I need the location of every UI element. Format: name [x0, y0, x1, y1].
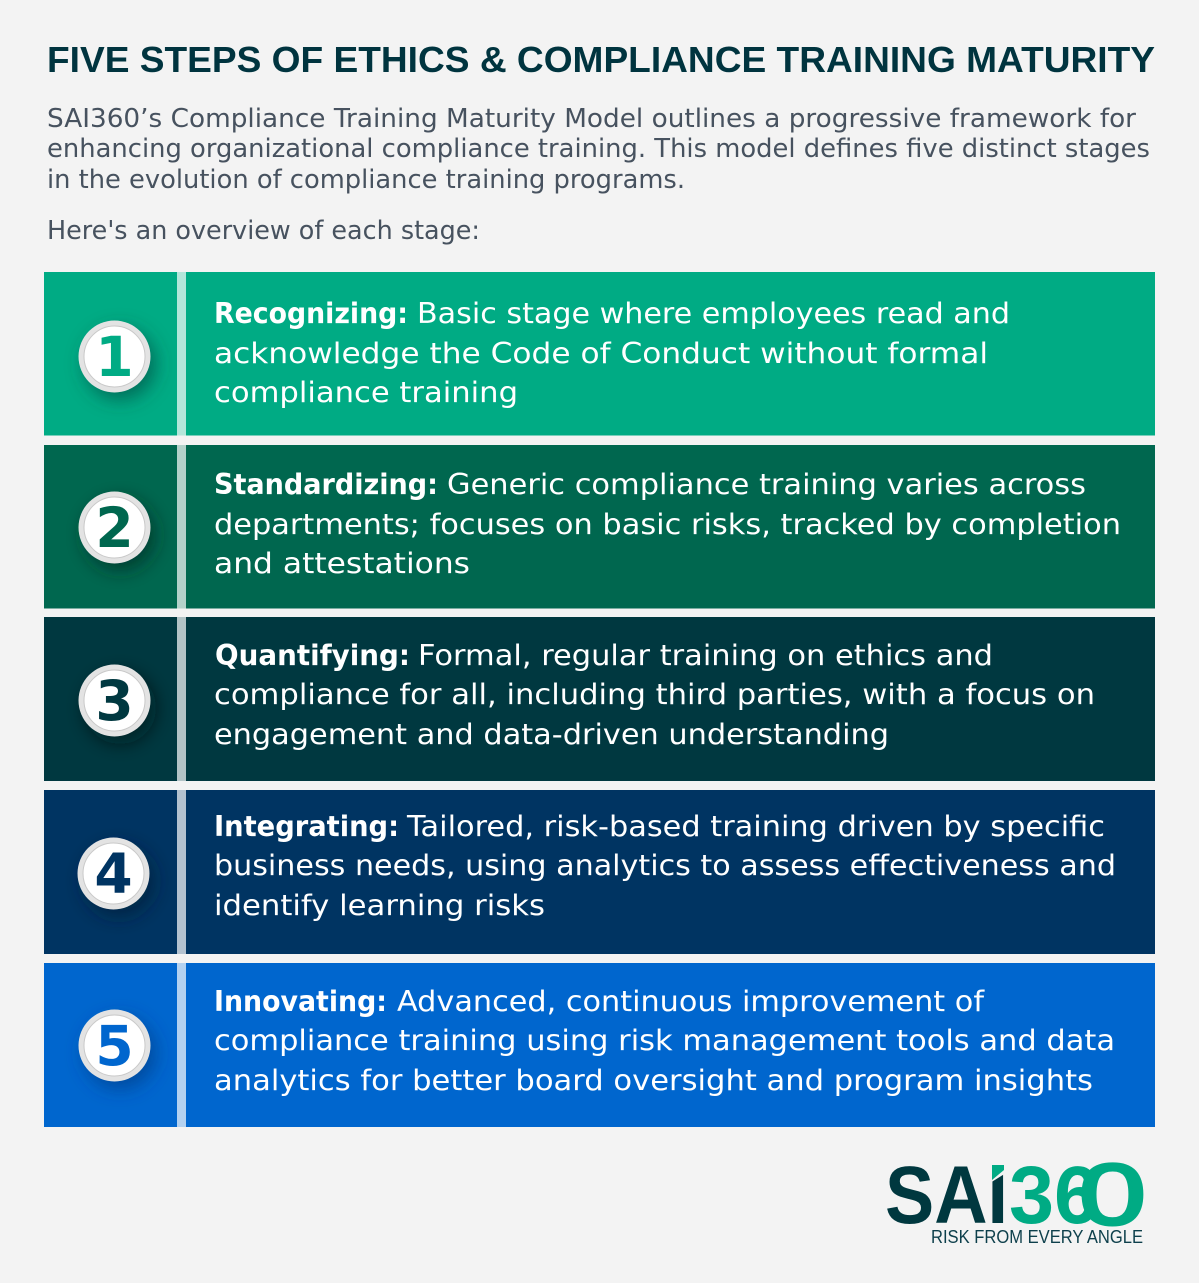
text: innovating description: Innovating:	[214, 985, 387, 1018]
icon: number 2 badge: 2	[95, 496, 134, 560]
text: recognizing description	[214, 297, 1010, 409]
text: recognizing description: Recognizing:	[214, 297, 408, 330]
panel: stage 1 recognizing	[44, 272, 1155, 436]
text: integrating description: Integrating:	[214, 810, 399, 843]
title: FIVE STEPS OF ETHICS & COMPLIANCE TRAINING MATURITY	[47, 39, 1155, 80]
icon: number 3 badge: 3	[95, 669, 134, 733]
text: recognizing description: Basic stage where employees read and	[417, 297, 1010, 330]
text: quantifying description: Formal, regular training on ethics and	[418, 639, 993, 672]
text: recognizing description: acknowledge the Code of Conduct without formal	[214, 337, 988, 370]
text: integrating description: identify learning risks	[214, 889, 545, 922]
panel: stage 3 quantifying	[44, 617, 1155, 781]
intro paragraph: enhancing organizational compliance training. This model defines five distinct stages	[47, 134, 1150, 164]
icon: number 4 badge	[78, 838, 155, 917]
text: standardizing description	[214, 468, 1121, 580]
logo: SAI360: SAI	[885, 1150, 1008, 1241]
icon: number 3 badge	[78, 664, 156, 744]
logo numerals: 0	[1079, 1147, 1146, 1243]
text: innovating description: Advanced, continuous improvement of	[397, 985, 985, 1018]
panel: stage 5 innovating	[44, 963, 1155, 1127]
text: standardizing description: departments; focuses on basic risks, tracked by completion	[214, 508, 1121, 541]
text: integrating description: Tailored, risk-based training driven by specific	[406, 810, 1105, 843]
logo: SAI360	[885, 1147, 1146, 1247]
overview lead-in: Here's an overview of each stage:	[47, 216, 480, 246]
logo numerals	[1009, 1147, 1146, 1243]
text: quantifying description: engagement and data-driven understanding	[214, 718, 889, 751]
text: standardizing description: Standardizing:	[214, 468, 438, 501]
text: integrating description	[214, 810, 1116, 922]
text: standardizing description: Generic compliance training varies across	[447, 468, 1086, 501]
icon: number 2 badge	[78, 492, 156, 571]
text: innovating description	[214, 985, 1115, 1097]
text: innovating description: compliance training using risk management tools and data	[214, 1024, 1115, 1057]
text: quantifying description: Quantifying:	[215, 639, 410, 672]
text: quantifying description: compliance for all, including third parties, with a focus on	[214, 678, 1095, 711]
text: quantifying description	[214, 639, 1095, 751]
text: standardizing description: and attestations	[214, 547, 470, 580]
icon: number 5 badge: 5	[95, 1014, 134, 1078]
text: integrating description: business needs, using analytics to assess effectiveness and	[214, 849, 1116, 882]
panel: stage 2 standardizing	[44, 445, 1155, 608]
icon: number 1 badge: 1	[95, 325, 134, 389]
intro paragraph	[47, 104, 1150, 195]
intro paragraph: SAI360’s Compliance Training Maturity Model outlines a progressive framework for	[47, 104, 1137, 134]
text: innovating description: analytics for better board oversight and program insights	[214, 1064, 1093, 1097]
icon: number 4 badge: 4	[94, 842, 133, 906]
intro paragraph: in the evolution of compliance training programs.	[47, 165, 685, 195]
logo numerals: 36	[1009, 1150, 1099, 1241]
panel: stage 4 integrating	[44, 790, 1155, 954]
logo accent on the letter I	[990, 1160, 1006, 1183]
logo tagline: RISK FROM EVERY ANGLE	[931, 1227, 1143, 1247]
icon: number 5 badge	[78, 1010, 156, 1089]
icon: number 1 badge	[78, 320, 156, 400]
text: recognizing description: compliance training	[214, 376, 518, 409]
